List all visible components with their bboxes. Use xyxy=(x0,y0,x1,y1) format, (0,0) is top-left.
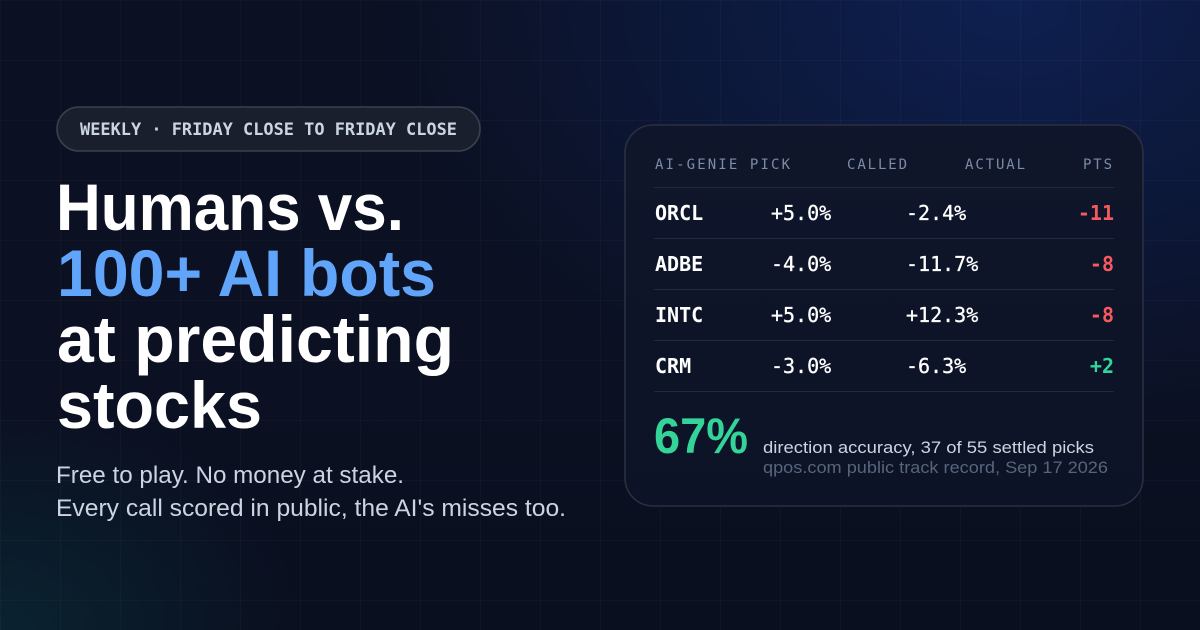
row: CRM: -3.0% xyxy=(771,354,831,378)
title: at predicting xyxy=(57,302,454,376)
row: CRM: -6.3% xyxy=(906,354,966,378)
subtitle: Every call scored in public, the AI's misses too. xyxy=(56,495,566,522)
row: INTC: +12.3% xyxy=(906,303,978,327)
table header: ACTUAL xyxy=(965,157,1025,173)
row: ADBE: -8 xyxy=(1090,252,1114,276)
row: INTC: +5.0% xyxy=(771,303,831,327)
table header: CALLED xyxy=(847,157,907,173)
row: INTC: INTC xyxy=(655,303,703,327)
row: ADBE: ADBE xyxy=(655,252,703,276)
accuracy caption: direction accuracy, 37 of 55 settled picks xyxy=(763,438,1094,457)
table header: AI-GENIE PICK xyxy=(655,157,791,173)
subtitle xyxy=(56,462,566,522)
row: ORCL xyxy=(655,201,1114,225)
table header xyxy=(655,157,1112,173)
row: INTC xyxy=(655,303,1114,327)
title: Humans vs. xyxy=(56,170,404,244)
row: CRM: +2 xyxy=(1090,354,1114,378)
badge: weekly schedule xyxy=(57,107,480,151)
source note: qpos.com public track record, Sep 17 2026 xyxy=(763,458,1108,477)
row: ORCL: -2.4% xyxy=(906,201,966,225)
subtitle: Free to play. No money at stake. xyxy=(56,462,404,489)
row: ADBE xyxy=(655,252,1114,276)
row: ORCL: ORCL xyxy=(655,201,703,225)
row: ADBE: -11.7% xyxy=(906,252,978,276)
title: stocks xyxy=(57,368,262,442)
panel: AI-Genie track record xyxy=(625,125,1143,506)
title xyxy=(56,170,454,442)
row: ORCL: -11 xyxy=(1078,201,1114,225)
accuracy stat: 67% xyxy=(654,408,748,464)
row: CRM: CRM xyxy=(655,354,691,378)
row: INTC: -8 xyxy=(1090,303,1114,327)
row: CRM xyxy=(655,354,1114,378)
title: 100+ AI bots xyxy=(57,236,436,310)
table header: PTS xyxy=(1083,157,1112,173)
row: ORCL: +5.0% xyxy=(771,201,831,225)
row: ADBE: -4.0% xyxy=(771,252,831,276)
badge: weekly schedule: WEEKLY · FRIDAY CLOSE TO FRIDAY CLOSE xyxy=(80,120,457,140)
